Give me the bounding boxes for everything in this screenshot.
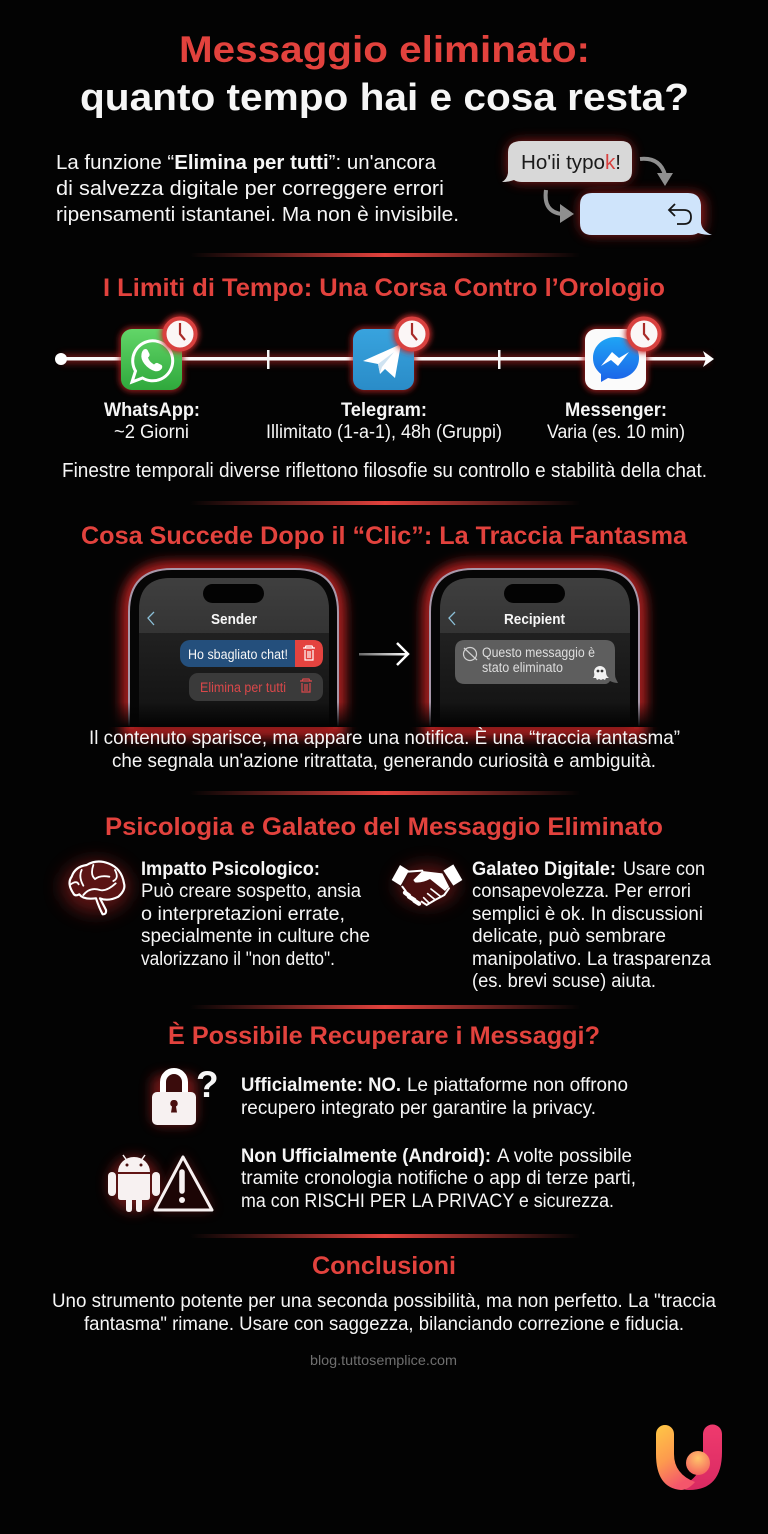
- bubble: typo: Ho'ii typok!: [521, 152, 621, 174]
- warning: [155, 1157, 212, 1210]
- text: digital etiquette: manipolativo. La trasparenza: [472, 949, 711, 970]
- phone: recipient: [406, 569, 664, 730]
- heading: time limits: I Limiti di Tempo: Una Corsa Contro l’Orologio: [103, 274, 665, 302]
- label: Telegram: Telegram:: [341, 400, 427, 421]
- text: digital etiquette: consapevolezza. Per errori: [472, 881, 691, 902]
- label: Messenger: Varia (es. 10 min): [547, 422, 685, 443]
- text: officially: [241, 1075, 628, 1119]
- divider: [190, 501, 580, 505]
- bubble: typo: [502, 141, 632, 182]
- text: unofficially: tramite cronologia notifiche o app di terze parti,: [241, 1168, 636, 1189]
- android: [118, 1157, 150, 1172]
- intro text: di salvezza digitale per correggere errori: [56, 177, 444, 200]
- text: unofficially: Non Ufficialmente (Android):: [241, 1146, 491, 1167]
- icon: Telegram: [351, 327, 416, 392]
- text: officially: Ufficialmente: NO.: [241, 1075, 401, 1096]
- text: psychological impact: specialmente in culture che: [141, 926, 370, 947]
- divider: [190, 1005, 580, 1009]
- text: digital etiquette: delicate, può sembrare: [472, 926, 666, 947]
- intro text: ripensamenti istantanei. Ma non è invisibile.: [56, 203, 459, 226]
- arrow: top right: [640, 159, 665, 175]
- source url: blog.tuttosemplice.com: [310, 1352, 457, 1368]
- label: Telegram: Illimitato (1-a-1), 48h (Gruppi): [266, 422, 502, 443]
- heading: psychology: Psicologia e Galateo del Messaggio Eliminato: [105, 813, 663, 841]
- heading: after the click: Cosa Succede Dopo il “Clic”: La Traccia Fantasma: [81, 522, 688, 550]
- bubble: wrong chat: [180, 640, 323, 667]
- arrow: sender to recipient: [359, 643, 408, 665]
- logo: [656, 1424, 722, 1490]
- text: conclusions: fantasma" rimane. Usare con saggezza, bilanciando correzione e fiducia.: [84, 1313, 684, 1335]
- intro text: La funzione “Elimina per tutti”: un'ancora: [56, 151, 437, 174]
- text: conclusions: Uno strumento potente per una seconda possibilità, ma non perfetto. La "traccia: [52, 1290, 716, 1312]
- heading: conclusions: Conclusioni: [312, 1252, 456, 1280]
- text: unofficially: ma con RISCHI PER LA PRIVACY e sicurezza.: [241, 1191, 614, 1212]
- phone: recipient: Recipient: [504, 611, 565, 628]
- text: ghost trace: [89, 726, 680, 772]
- timeline: [55, 315, 714, 392]
- text: officially: recupero integrato per garantire la privacy.: [241, 1098, 596, 1119]
- icon: ghost: [593, 666, 609, 680]
- bubble: deleted message: Questo messaggio è: [482, 645, 595, 660]
- text: digital etiquette: Usare con: [623, 859, 705, 880]
- divider: [190, 1234, 580, 1238]
- dynamic island: [203, 584, 264, 603]
- text: psychological impact: [141, 859, 370, 970]
- icon: Messenger: [583, 327, 648, 392]
- bubble: deleted message: [455, 640, 618, 684]
- bubble: wrong chat: Ho sbagliato chat!: [188, 647, 288, 662]
- menu: delete for all: Elimina per tutti: [200, 680, 286, 695]
- label: Telegram: [266, 400, 502, 443]
- text: digital etiquette: (es. brevi scuse) aiuta.: [472, 971, 656, 992]
- icon: padlock with question mark: [152, 1064, 219, 1125]
- text: digital etiquette: semplici è ok. In discussioni: [472, 904, 703, 925]
- text: psychological impact: valorizzano il "non detto".: [141, 949, 335, 970]
- phone: sender: [105, 569, 363, 730]
- text: officially: Le piattaforme non offrono: [407, 1075, 628, 1096]
- intro text: [56, 151, 459, 226]
- title: Messaggio eliminato:: [179, 29, 590, 70]
- icon: handshake: [392, 864, 462, 905]
- dynamic island: [504, 584, 565, 603]
- bubble: deleted message: stato eliminato: [482, 660, 563, 675]
- divider: [190, 791, 580, 795]
- icon: clock badges: [161, 315, 663, 353]
- text: digital etiquette: Galateo Digitale:: [472, 859, 616, 880]
- divider: [190, 253, 580, 257]
- text: psychological impact: Può creare sospetto, ansia: [141, 881, 361, 902]
- caption: time windows: Finestre temporali diverse riflettono filosofie su controllo e stabilità della chat.: [62, 460, 707, 482]
- text: digital etiquette: [472, 859, 711, 992]
- icon: android and warning: [108, 1155, 213, 1212]
- text: unofficially: A volte possibile: [497, 1146, 632, 1167]
- arrow: bottom left: [546, 190, 562, 214]
- text: psychological impact: o interpretazioni errate,: [141, 904, 345, 925]
- label: Messenger: Messenger:: [565, 400, 667, 421]
- title: [80, 29, 689, 119]
- title: quanto tempo hai e cosa resta?: [80, 77, 689, 119]
- text: conclusions: [52, 1290, 716, 1335]
- text: psychological impact: Impatto Psicologico:: [141, 859, 320, 880]
- text: unofficially: [241, 1146, 636, 1212]
- menu: delete for all: [189, 673, 323, 701]
- label: WhatsApp: WhatsApp:: [104, 400, 200, 421]
- icon: padlock with question mark: ?: [196, 1064, 219, 1105]
- bubble: undo: [580, 193, 712, 235]
- icon: chat bubbles with undo: [502, 141, 712, 235]
- icon: brain: [62, 861, 130, 914]
- icon: WhatsApp: [119, 327, 184, 392]
- phone: sender: Sender: [211, 611, 257, 628]
- text: ghost trace: che segnala un'azione ritrattata, generando curiosità e ambiguità.: [112, 750, 656, 772]
- text: ghost trace: Il contenuto sparisce, ma appare una notifica. È una “traccia fantasma”: [89, 726, 680, 749]
- heading: recovery: È Possibile Recuperare i Messaggi?: [168, 1021, 600, 1050]
- label: Messenger: [547, 400, 685, 443]
- label: WhatsApp: ~2 Giorni: [114, 422, 189, 443]
- label: WhatsApp: [104, 400, 200, 443]
